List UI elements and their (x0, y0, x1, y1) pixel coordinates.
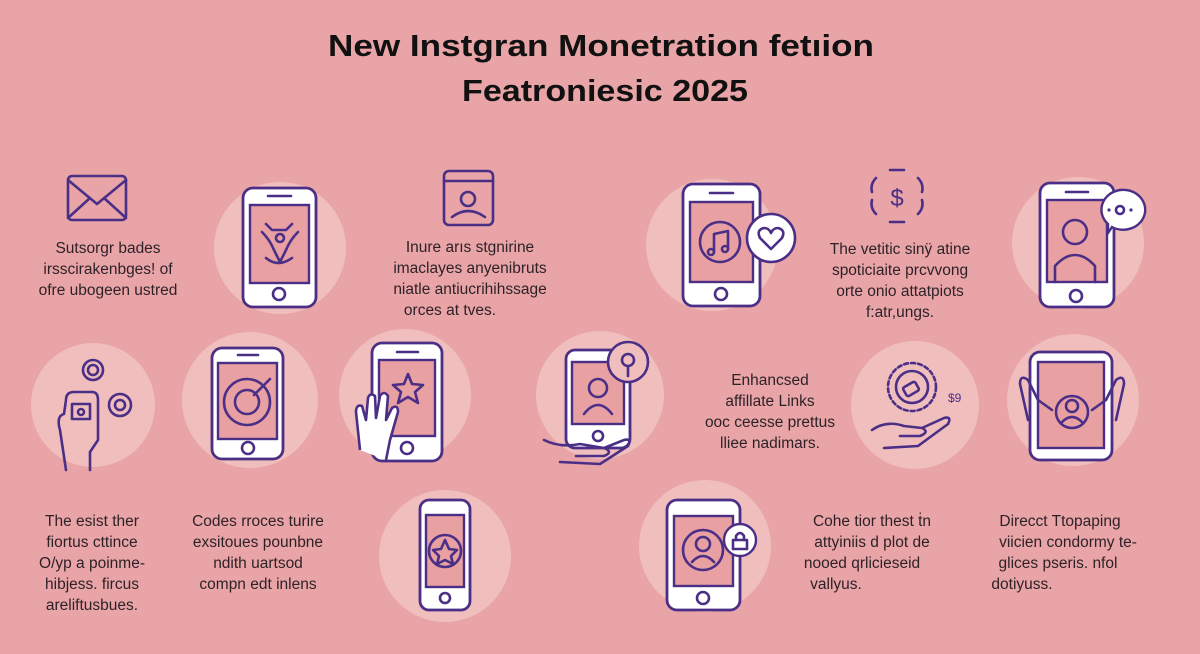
text block: bottom left 2: exsitoues pounbne (193, 534, 323, 551)
title: Featroniesic 2025 (462, 73, 748, 108)
text block: image features (393, 239, 547, 319)
text block: visibility: The vetitic sinÿ atine (830, 241, 970, 258)
icon: photo frame (444, 171, 493, 225)
text block: visibility: spoticiaite prcvvong (832, 262, 968, 279)
panel: phone with person and chat bubble (1012, 177, 1145, 309)
panel: phone with music and heart (646, 179, 795, 311)
text block: enhanced affiliate links: ooc ceesse prettus (705, 414, 835, 431)
text block: visibility: orte onio attatpiots (836, 283, 964, 300)
text block: subscriber badges (39, 240, 177, 299)
panel: phone with profile and hand (536, 331, 664, 464)
text block: bottom left 1: fiortus cttince (46, 534, 138, 551)
text block: bottom right 2 (991, 513, 1137, 593)
text block: bottom left 1 (39, 513, 145, 614)
text block: image features: imaclayes anyenibruts (393, 260, 547, 277)
icon: dollar (872, 170, 922, 222)
text block: subscriber badges: ofre ubogeen ustred (39, 282, 177, 299)
text block: enhanced affiliate links (705, 372, 835, 452)
text block: visibility (830, 241, 970, 321)
icon: envelope (68, 176, 126, 220)
panel: phone with star badge (379, 490, 511, 622)
text block: enhanced affiliate links: Enhancsed (731, 372, 809, 389)
text block: enhanced affiliate links: lliee nadimars. (720, 435, 820, 452)
text block: bottom left 2: Codes rroces turire (192, 513, 324, 530)
text block: bottom left 1: areliftusbues. (46, 597, 138, 614)
text block: enhanced affiliate links: affillate Links (725, 393, 815, 410)
text block: bottom right 2: glices pseris. nfol (999, 555, 1117, 572)
text block: bottom left 2 (192, 513, 324, 593)
icon: dollar: $ (890, 185, 904, 212)
panel: phone with badge icon (214, 182, 346, 314)
text block: bottom right 1: attyiniis d plot de (814, 534, 930, 551)
panel: phone with hands and user (1007, 334, 1139, 466)
panel: phone with star and hand (339, 329, 471, 461)
panel: phone with profile and lock (639, 480, 771, 612)
panel: phone with target (182, 332, 318, 468)
panel: hand holding badge: $9 (948, 391, 962, 405)
text block: bottom left 1: hibjess. fircus (45, 576, 139, 593)
text block: bottom right 1: nooed qrlicieseid (804, 555, 920, 572)
text block: bottom right 1: Cohe tior thest ṫn (813, 512, 931, 530)
text block: image features: niatle antiucrihihssage (393, 281, 547, 298)
text block: bottom right 2: viicien condormy te- (999, 534, 1137, 551)
text block: bottom left 1: The esist ther (45, 513, 139, 530)
text block: visibility: f:atr,ungs. (866, 304, 934, 321)
text block: bottom left 2: ndith uartsod (213, 555, 303, 572)
text block: bottom right 1: vallyus. (810, 576, 862, 593)
title: New Instgran Monetration fetıion (328, 28, 874, 63)
panel: hand with phone and gears (31, 343, 155, 470)
text block: bottom right 1 (804, 512, 931, 593)
text block: subscriber badges: irsscirakenbges! of (43, 261, 173, 278)
panel: hand holding badge (851, 341, 979, 469)
text block: bottom right 2: dotiyuss. (991, 576, 1053, 593)
title (328, 28, 874, 108)
text block: bottom left 2: compn edt inlens (199, 576, 317, 593)
text block: image features: orces at tves. (404, 302, 496, 319)
text block: bottom left 1: O/yp a poinme- (39, 555, 145, 572)
text block: image features: Inure arıs stgnirine (406, 239, 534, 256)
text block: bottom right 2: Direcct Ttopaping (999, 513, 1121, 530)
text block: subscriber badges: Sutsorgr bades (55, 240, 161, 257)
